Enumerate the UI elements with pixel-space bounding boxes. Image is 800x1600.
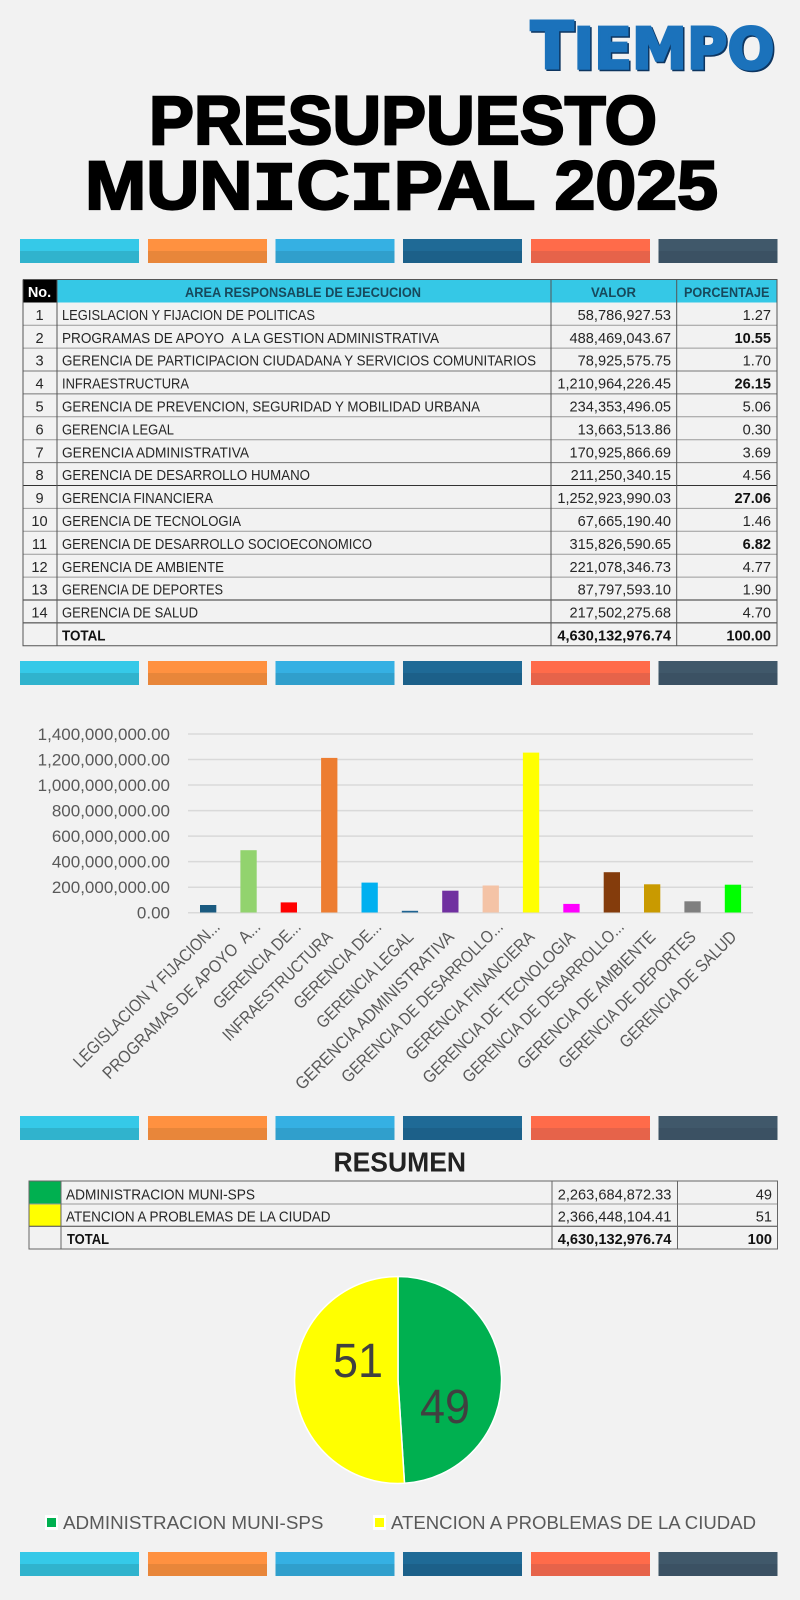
x axis labels: GERENCIA ADMINISTRATIVA	[291, 926, 458, 1094]
summary row: total	[67, 1232, 772, 1248]
row 14: 4.70	[743, 606, 771, 622]
summary row: administracion: 49	[756, 1187, 772, 1203]
pie chart	[295, 1276, 502, 1484]
summary row: atencion	[66, 1210, 772, 1226]
table header: AREA RESPONSABLE DE EJECUCION	[185, 285, 421, 301]
row 11: 315,826,590.65	[570, 537, 671, 553]
row 2: 488,469,043.67	[570, 331, 671, 347]
row 13	[31, 583, 771, 599]
row 14: GERENCIA DE SALUD	[62, 606, 198, 622]
pie legend: ATENCION A PROBLEMAS DE LA CIUDAD	[391, 1512, 756, 1533]
table header	[23, 280, 777, 302]
y axis labels	[38, 725, 170, 923]
row 4: 26.15	[734, 377, 771, 393]
row 13: 13	[31, 583, 48, 599]
x axis labels: GERENCIA DE SALUD	[615, 927, 740, 1052]
row 13: 1.90	[743, 583, 771, 599]
summary row: total: TOTAL	[67, 1232, 109, 1248]
row 5: 234,353,496.05	[570, 400, 671, 416]
table header: No.	[28, 285, 51, 301]
row 4	[35, 377, 771, 393]
row 11: 11	[32, 537, 47, 553]
row 9	[35, 491, 771, 507]
row 9: 9	[35, 491, 44, 507]
x axis labels: LEGISLACION Y FIJACION...	[69, 917, 224, 1072]
color strip 4	[20, 1552, 778, 1576]
pie chart: 49	[420, 1381, 470, 1434]
row 11	[32, 537, 771, 553]
row 8: 211,250,340.15	[571, 468, 671, 484]
row 6: 13,663,513.86	[578, 422, 671, 438]
row 1: 58,786,927.53	[578, 308, 671, 324]
row 2: 2	[35, 331, 44, 347]
row 4: INFRAESTRUCTURA	[62, 377, 189, 393]
y axis labels: 400,000,000.00	[52, 853, 170, 872]
summary row: administracion: ADMINISTRACION MUNI-SPS	[66, 1187, 255, 1203]
x axis labels: GERENCIA FINANCIERA	[401, 926, 539, 1064]
title	[85, 82, 718, 230]
row 7: 3.69	[743, 445, 771, 461]
y axis labels: 200,000,000.00	[52, 878, 170, 897]
x axis labels: GERENCIA DE DESARROLLO...	[337, 917, 507, 1086]
row 5: 5	[35, 400, 44, 416]
x axis labels: INFRAESTRUCTURA	[218, 926, 337, 1045]
summary row: atencion: 2,366,448,104.41	[558, 1210, 671, 1226]
table header: PORCENTAJE	[684, 285, 770, 301]
row 5: GERENCIA DE PREVENCION, SEGURIDAD Y MOBILIDAD URBANA	[62, 400, 480, 416]
row 5	[35, 400, 771, 416]
x axis labels: PROGRAMAS DE APOYO A...	[98, 917, 264, 1083]
row 3: 3	[35, 354, 44, 370]
summary row: atencion: 51	[756, 1210, 772, 1226]
x axis labels: GERENCIA DE...	[289, 917, 385, 1013]
row 14: 217,502,275.68	[570, 606, 671, 622]
y axis labels: 800,000,000.00	[52, 802, 170, 821]
row 11: 6.82	[743, 537, 771, 553]
summary row: total: 100	[748, 1232, 772, 1248]
row 7: GERENCIA ADMINISTRATIVA	[62, 445, 249, 461]
row 8: 8	[35, 468, 44, 484]
row 3: 1.70	[743, 354, 771, 370]
y axis labels: 0.00	[137, 904, 170, 923]
summary row: atencion: ATENCION A PROBLEMAS DE LA CIUDAD	[66, 1210, 330, 1226]
y axis labels: 1,400,000,000.00	[38, 725, 170, 744]
row 8	[35, 468, 771, 484]
row 12: 12	[31, 560, 48, 576]
x axis labels: GERENCIA DE...	[209, 917, 305, 1013]
row 6: 0.30	[743, 422, 771, 438]
row 9: 27.06	[734, 491, 771, 507]
row 1: LEGISLACION Y FIJACION DE POLITICAS	[62, 308, 315, 324]
title: PRESUPUESTO	[149, 82, 657, 159]
x axis labels: GERENCIA DE DEPORTES	[554, 927, 700, 1072]
y axis labels: 1,000,000,000.00	[38, 776, 170, 795]
row 10: 1.46	[743, 514, 771, 530]
row 1: 1.27	[743, 308, 771, 324]
row 2: PROGRAMAS DE APOYO A LA GESTION ADMINISTRATIVA	[62, 331, 439, 347]
row 12	[31, 560, 771, 576]
title: MUNICIPAL 2025	[85, 147, 718, 230]
y axis labels: 600,000,000.00	[52, 827, 170, 846]
color strip 3	[20, 1116, 778, 1140]
bar chart	[38, 725, 753, 1094]
x axis labels: GERENCIA DE AMBIENTE	[513, 927, 659, 1073]
row 8: 4.56	[743, 468, 771, 484]
row 13: GERENCIA DE DEPORTES	[62, 583, 223, 599]
color strip 1	[20, 239, 778, 263]
row 2: 10.55	[734, 331, 771, 347]
y axis labels: 1,200,000,000.00	[38, 750, 170, 770]
summary row: administracion	[66, 1187, 772, 1203]
panel: summary table	[29, 1181, 778, 1249]
row 1	[35, 308, 771, 324]
heading: resumen: RESUMEN	[334, 1146, 466, 1178]
total row: TOTAL	[62, 628, 106, 644]
row 14: 14	[31, 606, 48, 622]
row 12: 4.77	[743, 560, 771, 576]
logo: TIEMPO: TIEMPO	[530, 10, 774, 84]
row 10: 10	[31, 514, 48, 530]
row 1: 1	[35, 308, 44, 324]
summary row: administracion: 2,263,684,872.33	[558, 1187, 671, 1203]
total row: 100.00	[726, 628, 771, 644]
row 3: 78,925,575.75	[578, 354, 671, 370]
row 11: GERENCIA DE DESARROLLO SOCIOECONOMICO	[62, 537, 372, 553]
table header: VALOR	[591, 285, 636, 301]
logo: TIEMPO: TIEMPO	[532, 11, 776, 86]
row 5: 5.06	[743, 400, 771, 416]
row 6: 6	[35, 422, 44, 438]
x axis labels: GERENCIA DE DESARROLLO...	[458, 917, 628, 1086]
pie chart: 51	[333, 1335, 383, 1388]
row 10: 67,665,190.40	[578, 514, 671, 530]
pie legend: ADMINISTRACION MUNI-SPS	[63, 1512, 324, 1533]
summary row: total: 4,630,132,976.74	[558, 1232, 672, 1248]
x axis labels: GERENCIA DE TECNOLOGIA	[418, 926, 579, 1087]
pie legend	[45, 1512, 756, 1533]
row 4: 4	[35, 377, 44, 393]
row 13: 87,797,593.10	[578, 583, 671, 599]
row 3	[35, 354, 771, 370]
row 7: 170,925,866.69	[570, 445, 671, 461]
row 9: 1,252,923,990.03	[557, 491, 671, 507]
row 10	[31, 514, 771, 530]
row 3: GERENCIA DE PARTICIPACION CIUDADANA Y SERVICIOS COMUNITARIOS	[62, 354, 536, 370]
total row	[62, 628, 771, 644]
x axis labels	[69, 917, 740, 1094]
row 6: GERENCIA LEGAL	[62, 422, 174, 438]
row 12: GERENCIA DE AMBIENTE	[62, 560, 224, 576]
bars	[200, 753, 741, 912]
row 7: 7	[35, 445, 44, 461]
row 10: GERENCIA DE TECNOLOGIA	[62, 514, 241, 530]
row 14	[31, 606, 771, 622]
row 4: 1,210,964,226.45	[557, 377, 671, 393]
row 9: GERENCIA FINANCIERA	[62, 491, 213, 507]
row 2	[35, 331, 771, 347]
row 7	[35, 445, 771, 461]
row 12: 221,078,346.73	[570, 560, 671, 576]
total row: 4,630,132,976.74	[557, 628, 672, 644]
x axis labels: GERENCIA LEGAL	[312, 926, 418, 1032]
color strip 2	[20, 661, 778, 685]
panel: budget table	[23, 280, 777, 646]
row 6	[35, 422, 771, 438]
row 8: GERENCIA DE DESARROLLO HUMANO	[62, 468, 310, 484]
